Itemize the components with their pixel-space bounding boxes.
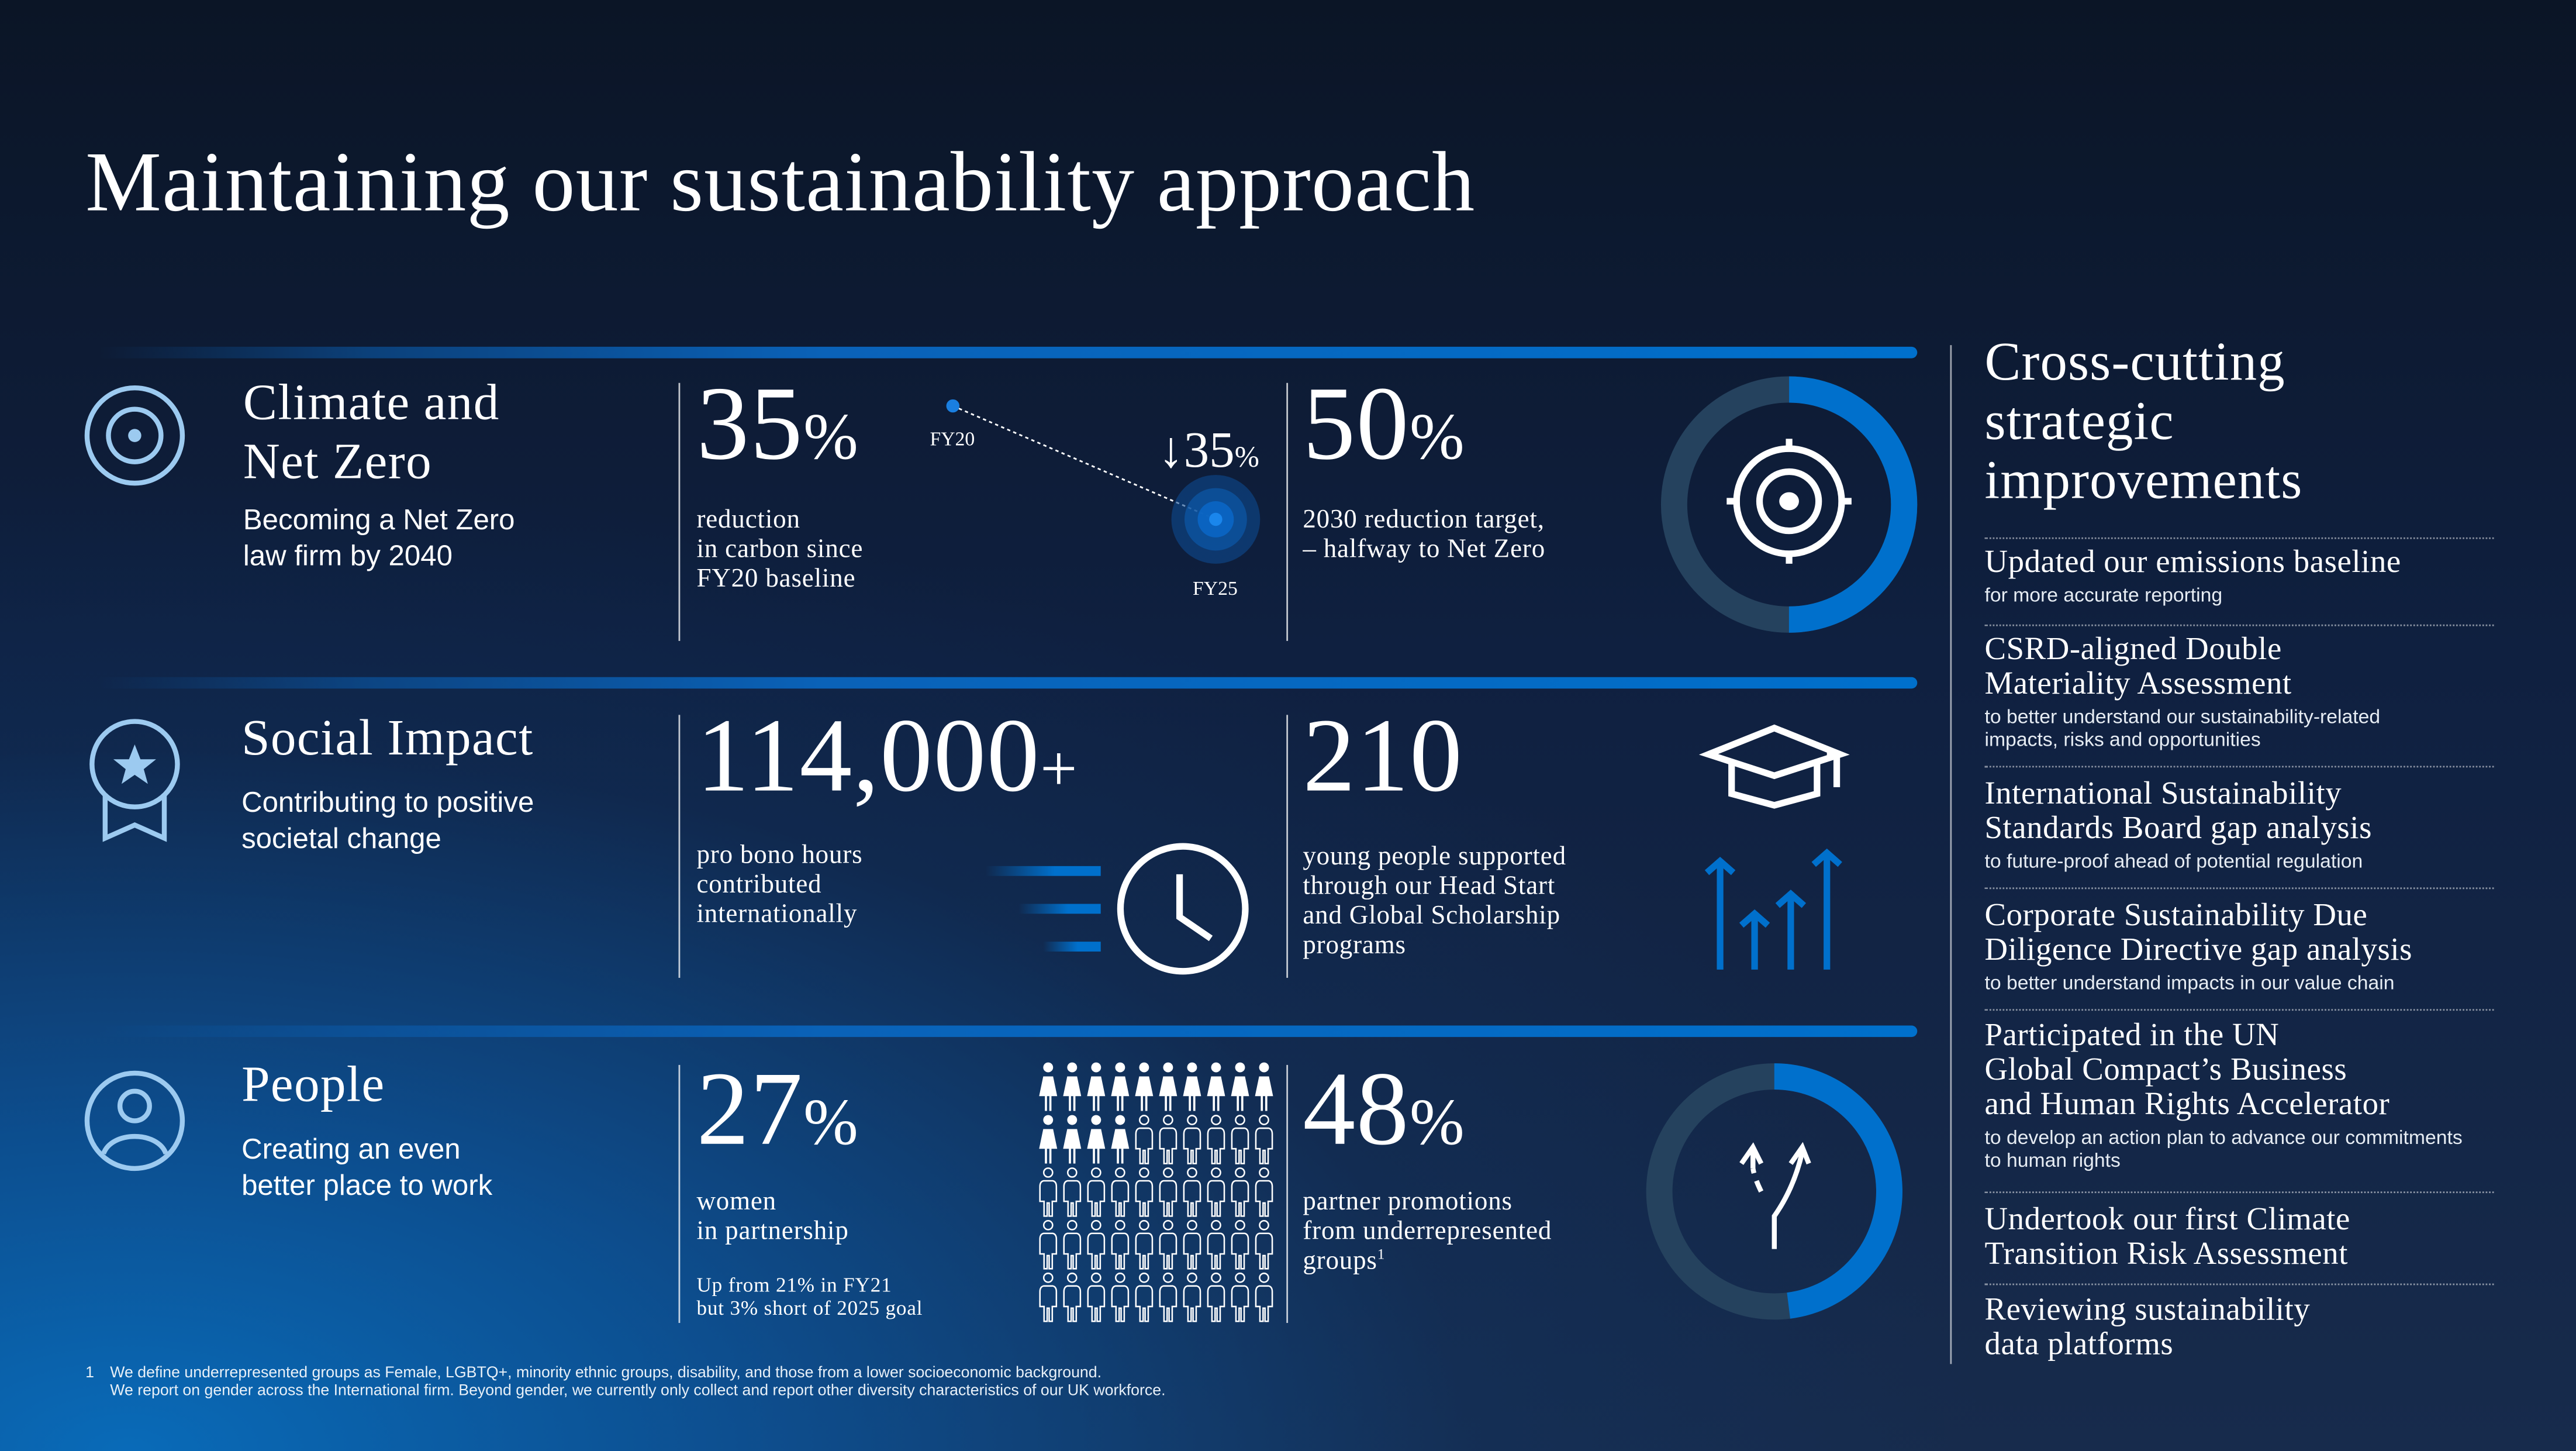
text [1303,506,1545,564]
item: CSDDD [1984,899,2511,994]
chart: people pictogram [1038,1061,1276,1328]
stat: 50%: 50% [1303,365,1465,481]
subtitle [241,1131,492,1203]
stat: 210 [1303,697,1566,960]
text: women [696,1188,776,1216]
subtitle: better place to work [241,1169,492,1201]
item: emissions baseline: for more accurate reporting [1984,584,2222,606]
text: young people supported [1303,843,1566,871]
item: CSRD: CSRD-aligned Double [1984,633,2282,667]
text: in partnership [696,1218,849,1246]
item: ISSB [1984,777,2511,873]
stat: 35% [696,365,863,593]
subtitle: Becoming a Net Zero [243,503,515,536]
text: FY20 baseline [696,566,855,593]
stat: 50% [1303,365,1545,564]
item: UN Global Compact: and Human Rights Accelerator [1984,1088,2389,1122]
note: but 3% short of 2025 goal [696,1297,923,1319]
stat: 114,000+ [696,697,1078,929]
chart: FY20 to FY25 [930,399,1261,599]
chart: FY20 to FY25: ↓35% [1158,421,1259,478]
item: ISSB: Standards Board gap analysis [1984,812,2372,846]
icon: graduation cap with arrows [1692,715,1856,978]
item: CSDDD: to better understand impacts in our value chain [1984,971,2395,994]
item: emissions baseline [1984,546,2511,606]
icon: award [89,719,180,842]
subtitle: Contributing to positive [241,785,534,818]
title: Maintaining our sustainability approach [85,136,1475,230]
panel: social impact [89,708,534,854]
item: CSRD [1984,633,2511,751]
stat: 27% [696,1057,976,1328]
item: ISSB: International Sustainability [1984,777,2342,812]
item: data platforms: data platforms [1984,1328,2173,1362]
stat: 27%: 27% [696,1050,859,1167]
item: CSRD: Materiality Assessment [1984,667,2292,702]
panel: people [65,1052,657,1216]
heading: Cross-cutting [1984,333,2285,393]
subtitle: Creating an even [241,1132,461,1165]
text: through our Head Start [1303,873,1555,901]
stat: 210: 210 [1303,697,1463,814]
text: in carbon since [696,536,863,564]
item: UN Global Compact [1984,1019,2511,1172]
text [696,842,863,929]
chart: FY20 to FY25: FY25 [1193,578,1238,599]
item: UN Global Compact: Participated in the UN [1984,1019,2279,1053]
item: climate transition [1984,1203,2511,1272]
stat: 114,000+: 114,000+ [696,697,1078,814]
text: – halfway to Net Zero [1303,536,1545,564]
footnote: 1 [85,1364,94,1382]
heading: strategic [1984,393,2174,452]
item: UN Global Compact: to human rights [1984,1149,2121,1172]
heading: People [241,1055,385,1112]
heading [243,373,500,490]
icon: person [82,1068,187,1173]
heading: Net Zero [243,432,432,490]
text: programs [1303,932,1406,960]
stat: 48%: 48% [1303,1050,1465,1167]
item: climate transition: Transition Risk Assessment [1984,1238,2348,1272]
right divider [1950,345,1952,1364]
subtitle: law firm by 2040 [243,539,453,572]
panel: climate [84,373,515,572]
heading: Climate and [243,373,500,430]
text [1303,1188,1615,1277]
text: partner promotions [1303,1188,1513,1216]
text: contributed [696,871,821,899]
item: CSDDD: Corporate Sustainability Due [1984,899,2367,933]
item: emissions baseline: Updated our emissions baseline [1984,546,2401,580]
item: CSDDD: Diligence Directive gap analysis [1984,933,2412,968]
text: internationally [696,901,857,929]
text: 2030 reduction target, [1303,506,1545,534]
footnote: We define underrepresented groups as Female, LGBTQ+, minority ethnic groups, disability, and those from a lower socioeconomic background. [110,1364,1101,1382]
panel: cross-cutting strategic improvements [1971,329,2530,1380]
donut: 48% with fork arrow [1643,1060,1906,1323]
item: data platforms: Reviewing sustainability [1984,1293,2310,1328]
heading [1984,333,2303,511]
item: climate transition: Undertook our first Climate [1984,1203,2350,1238]
heading: improvements [1984,452,2303,511]
donut: 50% with target icon [1661,377,1918,633]
icon: clock with speed lines [990,843,1249,974]
text: and Global Scholarship [1303,902,1560,930]
stat: 48% [1303,1057,1615,1287]
text: groups1 [1303,1246,1385,1276]
icon: target [84,385,185,485]
text: from underrepresented [1303,1218,1552,1246]
item: CSRD: to better understand our sustainability-related [1984,705,2380,728]
chart: FY20 to FY25: FY20 [930,429,975,450]
text [696,1188,976,1247]
subtitle: societal change [241,822,441,854]
subtitle [243,503,515,572]
row bars [130,346,1918,1038]
footnote [85,1364,1564,1400]
item: ISSB: to future-proof ahead of potential regulation [1984,850,2363,873]
item: data platforms [1984,1293,2511,1362]
subtitle [241,785,534,854]
text: reduction [696,506,800,534]
note: Up from 21% in FY21 [696,1274,892,1297]
item: UN Global Compact: Global Compact’s Business [1984,1053,2347,1088]
text [1303,843,1566,960]
text: pro bono hours [696,842,863,869]
heading: Social Impact [241,708,534,766]
item: UN Global Compact: to develop an action plan to advance our commitments [1984,1126,2463,1149]
stat: 35%: 35% [696,365,859,481]
text [696,506,863,593]
note [696,1274,992,1319]
item: CSRD: impacts, risks and opportunities [1984,728,2261,751]
footnote: We report on gender across the International firm. Beyond gender, we currently only collect and report other diversity characteristics of our UK workforce. [110,1382,1166,1400]
